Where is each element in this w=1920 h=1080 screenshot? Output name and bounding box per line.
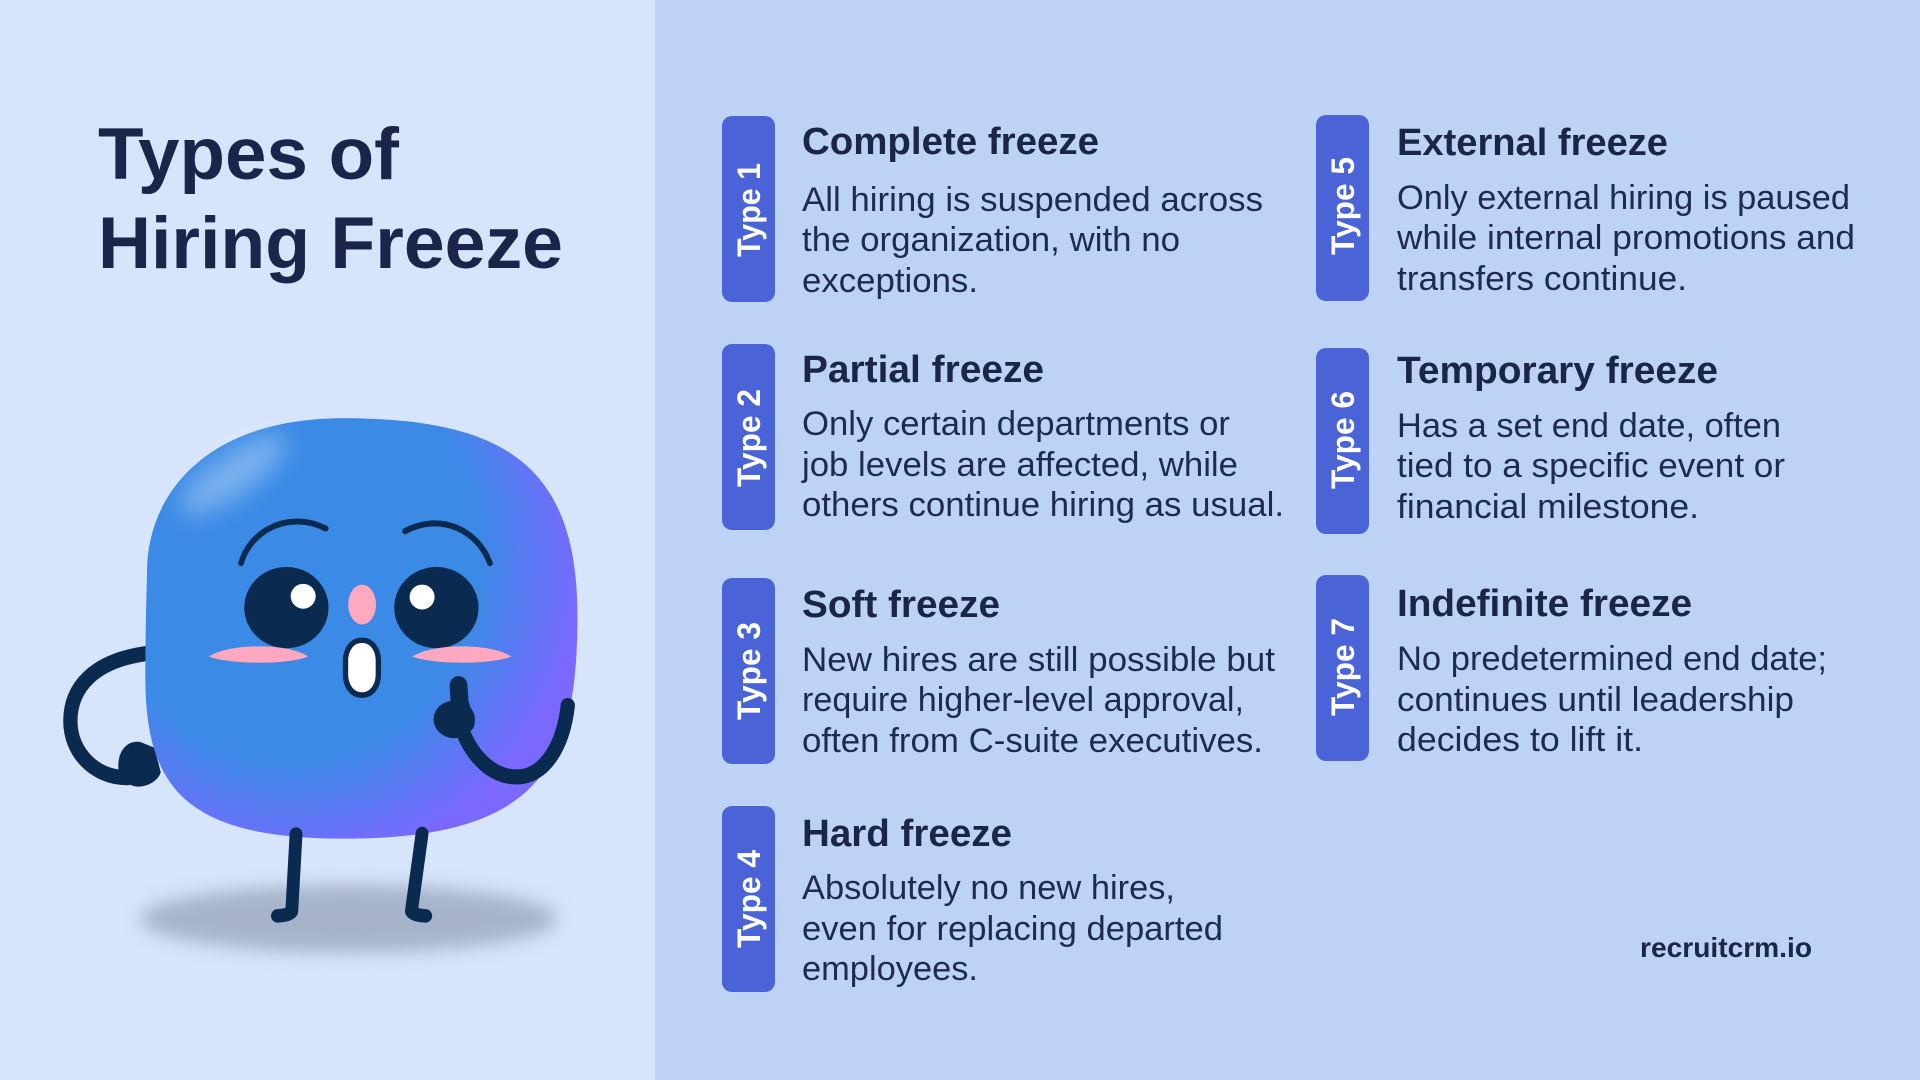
- description: New hires are still possible but: [802, 641, 1275, 679]
- description: [1397, 640, 1827, 759]
- description: continues until leadership: [1397, 681, 1794, 719]
- badge: Type 4: Type 4: [731, 850, 767, 948]
- item: Type 5 External freeze: External freeze: [1397, 122, 1668, 164]
- eyebrows: [241, 522, 490, 563]
- body highlight: [170, 421, 296, 528]
- description: [1396, 179, 1855, 298]
- item: Type 2 Partial freeze: Partial freeze: [802, 349, 1044, 391]
- nose: [348, 585, 376, 624]
- item: Type 5 External freeze: [1316, 115, 1855, 301]
- badge: Type 1: Type 1: [731, 163, 767, 257]
- badge: Type 1: [722, 116, 775, 302]
- description: require higher-level approval,: [802, 681, 1244, 719]
- description: tied to a specific event or: [1397, 447, 1785, 485]
- ground shadow: [140, 885, 558, 953]
- brand: recruitcrm.io: recruitcrm.io: [1640, 932, 1812, 963]
- badge: Type 3: Type 3: [731, 622, 767, 720]
- description: Only certain departments or: [802, 405, 1230, 443]
- item: Type 7 Indefinite freeze: [1316, 575, 1827, 761]
- mouth: [343, 638, 381, 698]
- description: often from C-suite executives.: [802, 722, 1263, 760]
- badge: Type 5: Type 5: [1325, 157, 1361, 255]
- description: [802, 181, 1263, 300]
- badge: Type 3: [722, 578, 775, 764]
- item: Type 6 Temporary freeze: [1316, 348, 1785, 534]
- description: No predetermined end date;: [1397, 640, 1827, 678]
- description: [801, 405, 1284, 524]
- item: Type 2 Partial freeze: [722, 344, 1284, 530]
- illustration: blue mascot: [70, 418, 577, 953]
- description: others continue hiring as usual.: [802, 486, 1284, 524]
- title: Hiring Freeze: [98, 203, 563, 284]
- description: Only external hiring is paused: [1397, 179, 1850, 217]
- description: [802, 641, 1275, 760]
- description: [1397, 407, 1785, 526]
- badge: Type 7: Type 7: [1325, 618, 1361, 716]
- body: [145, 418, 577, 839]
- description: [802, 869, 1223, 988]
- eyes: [244, 567, 479, 648]
- left arm: [70, 653, 161, 787]
- item: Type 3 Soft freeze: [722, 578, 1275, 764]
- panel: left background: [0, 0, 655, 1080]
- legs: [277, 833, 426, 916]
- badge: Type 2: [722, 344, 775, 530]
- description: decides to lift it.: [1397, 721, 1643, 759]
- title: [98, 114, 563, 284]
- description: job levels are affected, while: [801, 446, 1238, 484]
- right arm and hand: [434, 685, 568, 777]
- item: Type 7 Indefinite freeze: Indefinite freeze: [1397, 583, 1692, 625]
- item: Type 4 Hard freeze: [722, 806, 1223, 992]
- description: Absolutely no new hires,: [802, 869, 1175, 907]
- description: exceptions.: [802, 262, 978, 300]
- description: while internal promotions and: [1396, 219, 1855, 257]
- description: Has a set end date, often: [1397, 407, 1781, 445]
- description: transfers continue.: [1397, 260, 1687, 298]
- title: Types of: [98, 114, 400, 195]
- badge: Type 5: [1316, 115, 1369, 301]
- description: financial milestone.: [1397, 488, 1699, 526]
- panel: right background: [655, 0, 1920, 1080]
- item: Type 4 Hard freeze: Hard freeze: [802, 813, 1012, 855]
- item: Type 6 Temporary freeze: Temporary freeze: [1397, 350, 1718, 392]
- description: employees.: [802, 950, 978, 988]
- badge: Type 2: Type 2: [731, 389, 767, 487]
- badge: Type 6: [1316, 348, 1369, 534]
- item: Type 1 Complete freeze: Complete freeze: [802, 121, 1099, 163]
- cheeks: [209, 646, 511, 663]
- description: All hiring is suspended across: [802, 181, 1263, 219]
- item: Type 1 Complete freeze: [722, 116, 1263, 302]
- item: Type 3 Soft freeze: Soft freeze: [802, 584, 1000, 626]
- description: even for replacing departed: [802, 910, 1223, 948]
- badge: Type 6: Type 6: [1325, 391, 1361, 489]
- badge: Type 7: [1316, 575, 1369, 761]
- description: the organization, with no: [802, 221, 1180, 259]
- badge: Type 4: [722, 806, 775, 992]
